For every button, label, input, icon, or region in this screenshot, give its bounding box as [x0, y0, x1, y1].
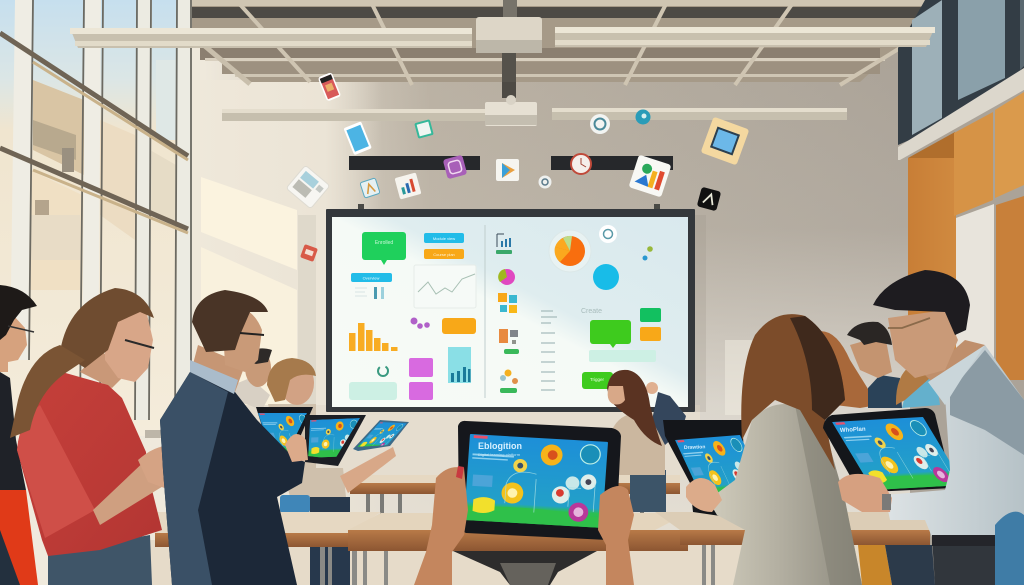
screen: green speech card: [590, 320, 631, 348]
screen: orange pill: [424, 249, 464, 259]
screen: bottom green card: [582, 372, 613, 389]
screen: avatars: [500, 370, 518, 393]
screen: small orange card: [640, 327, 661, 341]
icon: phone: [318, 72, 341, 102]
icon: small square: [414, 119, 434, 139]
person: woman in red shirt: [10, 288, 212, 585]
person: man in navy blazer: [160, 290, 308, 585]
person: blond student with tablets: [267, 358, 396, 585]
icon: tablet: [343, 121, 372, 155]
tablets: back left group: [256, 407, 409, 466]
screen: small icon badge: [599, 225, 617, 243]
screen: orange card: [442, 318, 476, 334]
left window wall: [0, 0, 195, 440]
wall brightness fade: [330, 60, 910, 540]
person: background students right: [815, 322, 940, 408]
screen: line chart: [414, 265, 476, 308]
person: man far left edge: [0, 285, 38, 585]
icon: bar chart tile: [395, 173, 421, 199]
icon: black tile: [697, 187, 721, 211]
person: student behind, dark hair: [233, 348, 272, 410]
tablet headline: Eblogition: [478, 441, 522, 451]
screen: small green card: [640, 308, 661, 322]
floor: [140, 540, 900, 585]
dark wall strips: [349, 156, 673, 170]
icon: red tag: [300, 244, 318, 262]
interactive display board: [326, 204, 695, 412]
window mullions: [10, 0, 192, 440]
person: man in light shirt: [838, 270, 1024, 585]
icon: small swirl: [538, 176, 552, 188]
person: woman in grey shirt from behind: [686, 314, 862, 585]
icon: large device tile: [286, 165, 330, 209]
screen: cyan circle: [593, 264, 619, 290]
screen: tile grid: [498, 293, 517, 313]
icon: A tile: [360, 178, 380, 198]
icon: blue badge: [636, 110, 650, 124]
icon: clock: [571, 154, 591, 174]
tablet one: [256, 407, 313, 452]
screen: photos thumbnails: [499, 329, 519, 354]
right window and wood panels: [898, 0, 1024, 385]
screen: blue pill: Module view: [433, 236, 455, 241]
screen: caption text: Create: [581, 308, 602, 315]
light tube fixtures: [70, 27, 935, 121]
icon: purple app: [443, 155, 467, 179]
screen: pink cards: [409, 358, 433, 400]
right man's tablet: [823, 408, 964, 492]
screen: green bubble card: Enrolled: [375, 240, 393, 246]
screen: blue label with list: [351, 273, 392, 299]
icon: frame tile: [701, 117, 749, 165]
tablet three: [353, 420, 409, 451]
tablet two: [305, 415, 366, 466]
screen: teal bar panel: [448, 347, 471, 383]
back row tables: [350, 475, 680, 514]
screen: small pie: [498, 269, 515, 285]
screen: green and blue dots: [642, 246, 653, 260]
person: teacher at display: [607, 370, 686, 512]
screen: bar chart: [349, 323, 398, 351]
screen: green bubble card: [362, 232, 406, 265]
icon: swirl badge: [590, 114, 610, 134]
front tables: [155, 512, 935, 585]
sunlight patches on wall: [190, 80, 765, 520]
tablet behind woman: [663, 420, 768, 520]
screen: main pie chart: [549, 230, 591, 272]
projector upper: [476, 0, 542, 85]
screen: chart icon: [496, 234, 512, 254]
projector lower: [485, 82, 537, 126]
screen: divider: [484, 225, 486, 398]
screen: blue pill: [424, 233, 464, 243]
tablet headline: WhoPlan: [840, 427, 866, 434]
screen: orange pill: Course plan: [433, 252, 455, 257]
screen: blue label with list: Overview: [363, 276, 379, 280]
hands holding central tablet: [414, 466, 634, 585]
ceiling with beams: [150, 0, 940, 85]
floating app icons: [286, 72, 749, 262]
screen: bottom green card: Trigger: [590, 377, 605, 382]
icon: colorful tile: [629, 155, 671, 197]
icon: play triangle: [496, 159, 519, 181]
tablet sub text: Digital learning platform: [478, 452, 521, 457]
central tablet held in hands: [458, 421, 621, 540]
tablet headline: Drawtion: [684, 444, 705, 451]
screen: list column: [541, 311, 557, 390]
screen: purple dots: [410, 318, 430, 329]
screen: mint bar: [589, 350, 656, 362]
screen: gauge and mint card: [349, 366, 397, 400]
